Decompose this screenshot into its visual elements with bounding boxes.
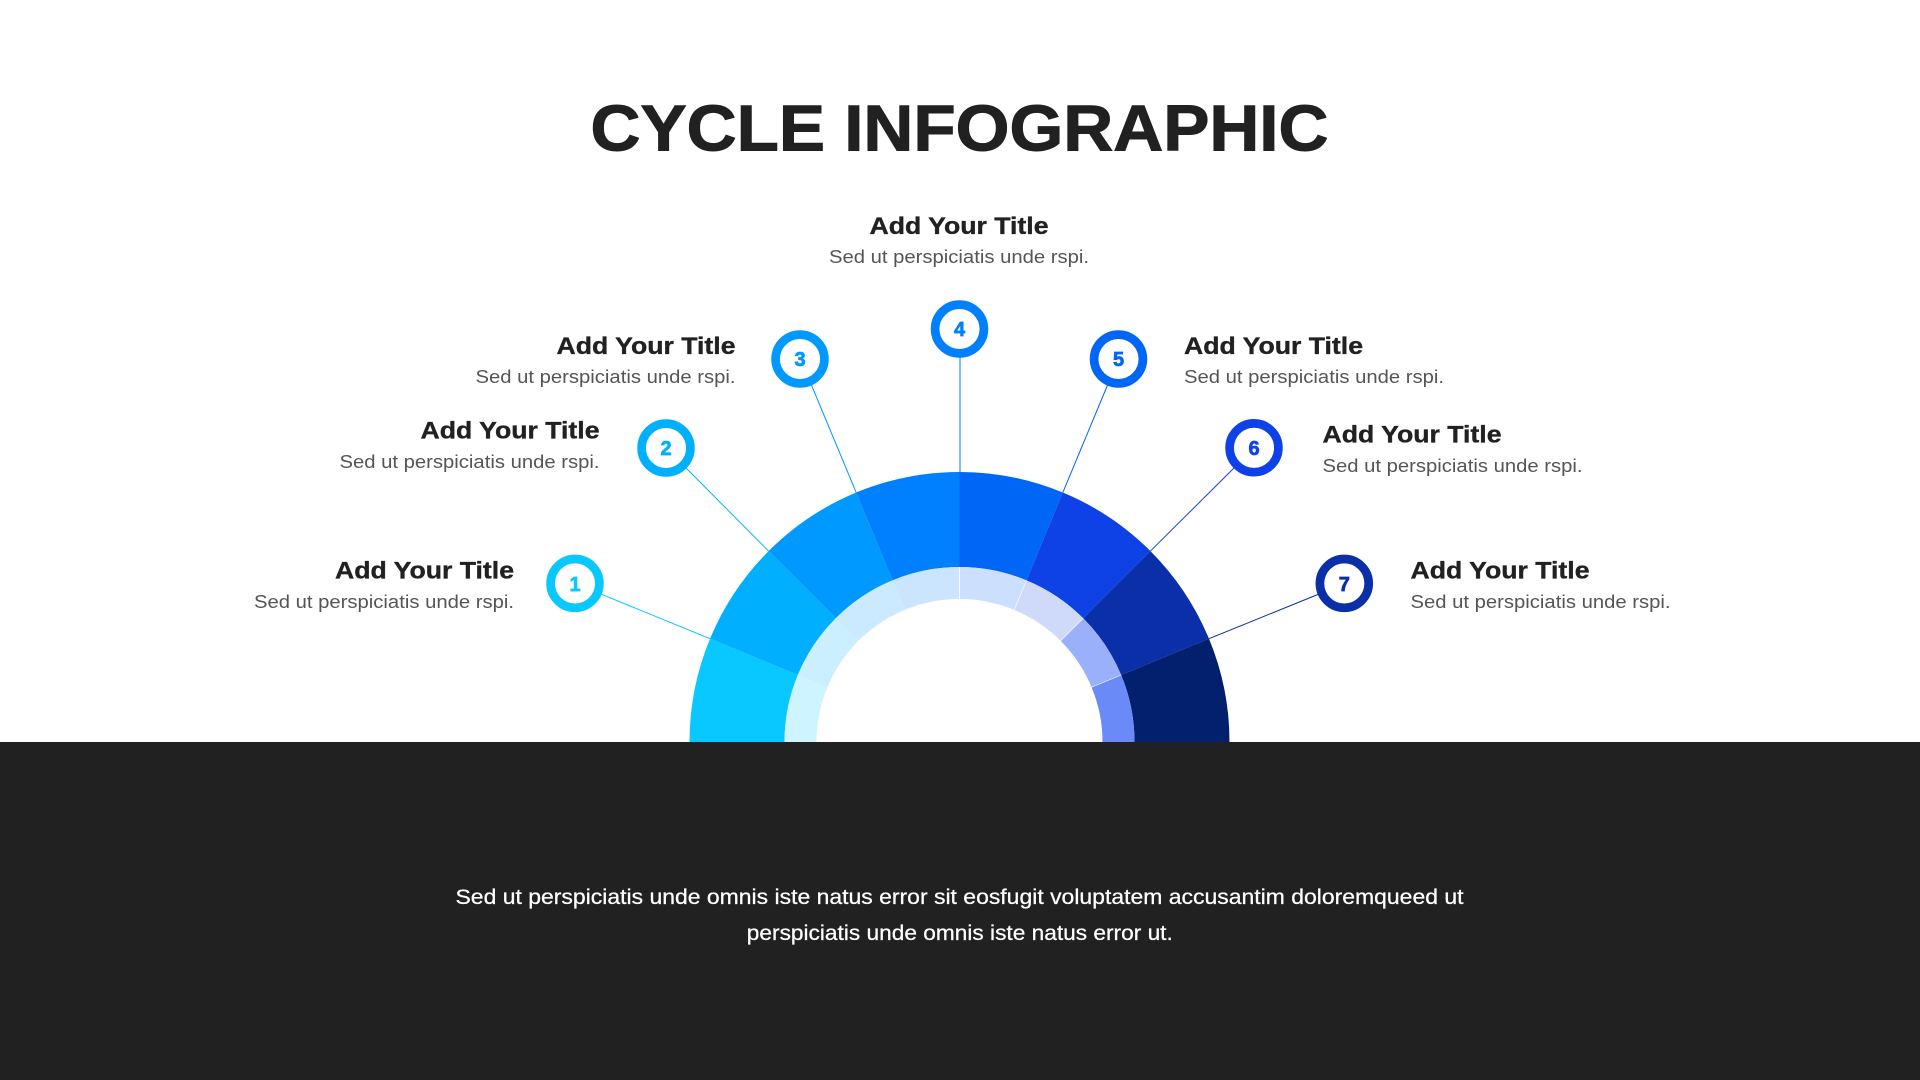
label 3 (476, 333, 736, 387)
leader line 6 (1150, 467, 1235, 551)
number 5: 5 (1113, 349, 1124, 371)
circle 1 (551, 559, 599, 608)
title: CYCLE INFOGRAPHIC (590, 92, 1328, 164)
leader line 2 (685, 467, 769, 551)
label 1: Add Your Title (335, 558, 514, 584)
label 2 (340, 418, 600, 472)
leader line 7 (1209, 594, 1319, 639)
marker 5 (1063, 335, 1143, 493)
label 5: Add Your Title (1184, 333, 1363, 360)
label 6 (1322, 422, 1582, 476)
dark bottom panel (0, 742, 1920, 1080)
number 3: 3 (794, 349, 806, 371)
label 6: Add Your Title (1322, 422, 1502, 449)
number 1: 1 (569, 574, 581, 596)
label 7: Add Your Title (1410, 558, 1590, 584)
body text (456, 886, 1464, 945)
label 2: Add Your Title (420, 418, 600, 445)
number 4: 4 (954, 319, 966, 341)
label 7 (1410, 558, 1670, 612)
label 1: Sed ut perspiciatis unde rspi. (254, 592, 514, 612)
circle 6 (1230, 423, 1278, 472)
inner ring segments (784, 567, 1134, 742)
label 5 (1184, 333, 1444, 387)
leader line 1 (600, 594, 710, 639)
leader line 3 (811, 384, 856, 493)
marker 3 (776, 335, 856, 493)
circle 3 (776, 335, 824, 383)
marker 7 (1209, 559, 1369, 639)
body text: perspiciatis unde omnis iste natus error ut. (747, 922, 1173, 945)
marker 6 (1150, 423, 1278, 551)
marker 4 (935, 305, 984, 472)
marker 2 (642, 424, 769, 551)
outer ring segments (690, 472, 1230, 742)
label 1 (254, 558, 514, 612)
body text: Sed ut perspiciatis unde omnis iste natus error sit eosfugit voluptatem accusantim doloremqueed ut (456, 886, 1464, 909)
label 3: Add Your Title (556, 333, 736, 360)
circle 2 (642, 424, 690, 472)
circle 7 (1320, 559, 1369, 608)
label 2: Sed ut perspiciatis unde rspi. (340, 452, 600, 472)
label 4: Sed ut perspiciatis unde rspi. (829, 247, 1089, 267)
number 7: 7 (1339, 574, 1350, 596)
label 5: Sed ut perspiciatis unde rspi. (1184, 367, 1444, 387)
marker 1 (551, 559, 710, 639)
leader line 4 (959, 357, 961, 472)
number 2: 2 (660, 438, 672, 460)
leader line 5 (1063, 384, 1108, 493)
label 3: Sed ut perspiciatis unde rspi. (476, 367, 736, 387)
semicircle cycle chart (690, 472, 1230, 742)
label 7: Sed ut perspiciatis unde rspi. (1410, 592, 1670, 612)
label 6: Sed ut perspiciatis unde rspi. (1322, 456, 1582, 476)
circle 4 (935, 305, 984, 353)
number 6: 6 (1248, 438, 1260, 460)
circle 5 (1094, 335, 1143, 383)
label 4 (829, 213, 1089, 267)
label 4: Add Your Title (870, 213, 1048, 240)
